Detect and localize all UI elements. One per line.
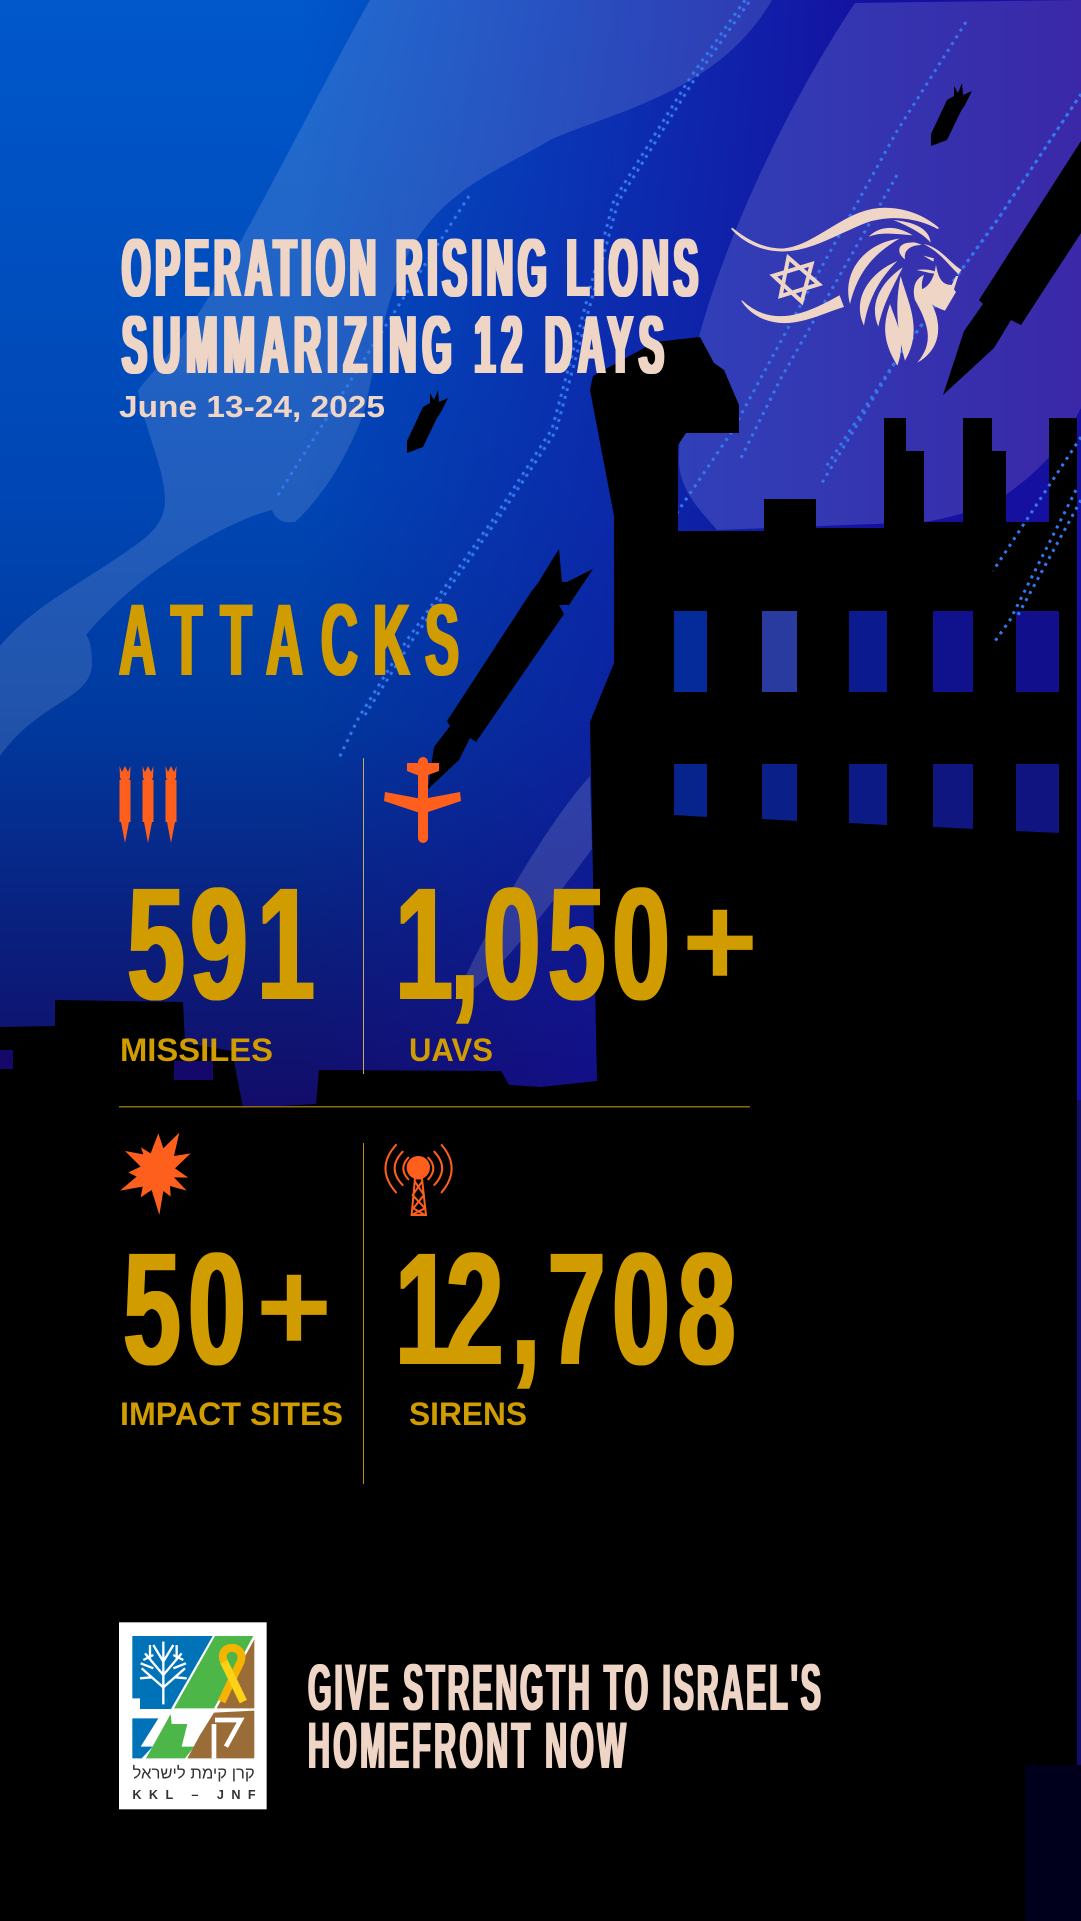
stat: impact sites xyxy=(120,1133,343,1432)
label sirens: SIRENS xyxy=(409,1396,527,1432)
stat: missiles xyxy=(120,766,315,1068)
date: June 13-24, 2025 xyxy=(119,389,385,424)
light wave shape xyxy=(0,0,772,756)
number 1,050+: + xyxy=(682,868,758,1014)
call to action: GIVE STRENGTH TO ISRAEL'S xyxy=(308,1651,821,1724)
stat: UAVs xyxy=(384,757,758,1068)
number 50+: 50 xyxy=(123,1219,246,1398)
label UAVs: UAVS xyxy=(409,1032,493,1068)
number 12,708: 12,708 xyxy=(395,1219,736,1398)
building windows xyxy=(0,611,1059,1080)
right purple shape xyxy=(679,0,1081,530)
call to action xyxy=(308,1651,821,1782)
stat: sirens xyxy=(385,1145,736,1432)
label impact sites: IMPACT SITES xyxy=(120,1396,343,1432)
missile trails behind the building xyxy=(276,0,1081,760)
lower crescent shape xyxy=(455,776,592,999)
label missiles: MISSILES xyxy=(120,1032,273,1068)
icon: UAV xyxy=(384,757,461,843)
call to action: HOMEFRONT NOW xyxy=(308,1709,626,1782)
small bomb top right xyxy=(931,83,972,146)
bottom right navy block xyxy=(1025,1765,1081,1921)
number 50+ xyxy=(123,1219,332,1398)
title: SUMMARIZING 12 DAYS xyxy=(122,298,664,391)
number 591: 591 xyxy=(127,854,315,1033)
KKL-JNF logo: קרן קימת לישראל xyxy=(133,1763,255,1782)
large missile centre xyxy=(428,549,593,789)
logo: flag and lion xyxy=(732,209,962,366)
attacks heading: ATTACKS xyxy=(119,584,459,698)
icon: siren tower xyxy=(385,1145,452,1215)
large missile upper right xyxy=(943,141,1081,395)
small bomb near date xyxy=(407,390,448,453)
stat dividers xyxy=(119,758,750,1484)
KKL-JNF logo xyxy=(119,1622,267,1809)
icon: explosion xyxy=(120,1133,191,1215)
ribbon xyxy=(222,1648,243,1702)
title: OPERATION RISING LIONS xyxy=(122,221,698,314)
number 50+: + xyxy=(256,1233,332,1379)
title xyxy=(122,221,698,391)
KKL-JNF logo: KKL – JNF xyxy=(132,1788,256,1802)
number 1,050+: 1,050 xyxy=(395,854,670,1033)
tree xyxy=(140,1642,187,1704)
missile trails over the building xyxy=(993,437,1081,644)
icon: missiles xyxy=(120,766,176,843)
